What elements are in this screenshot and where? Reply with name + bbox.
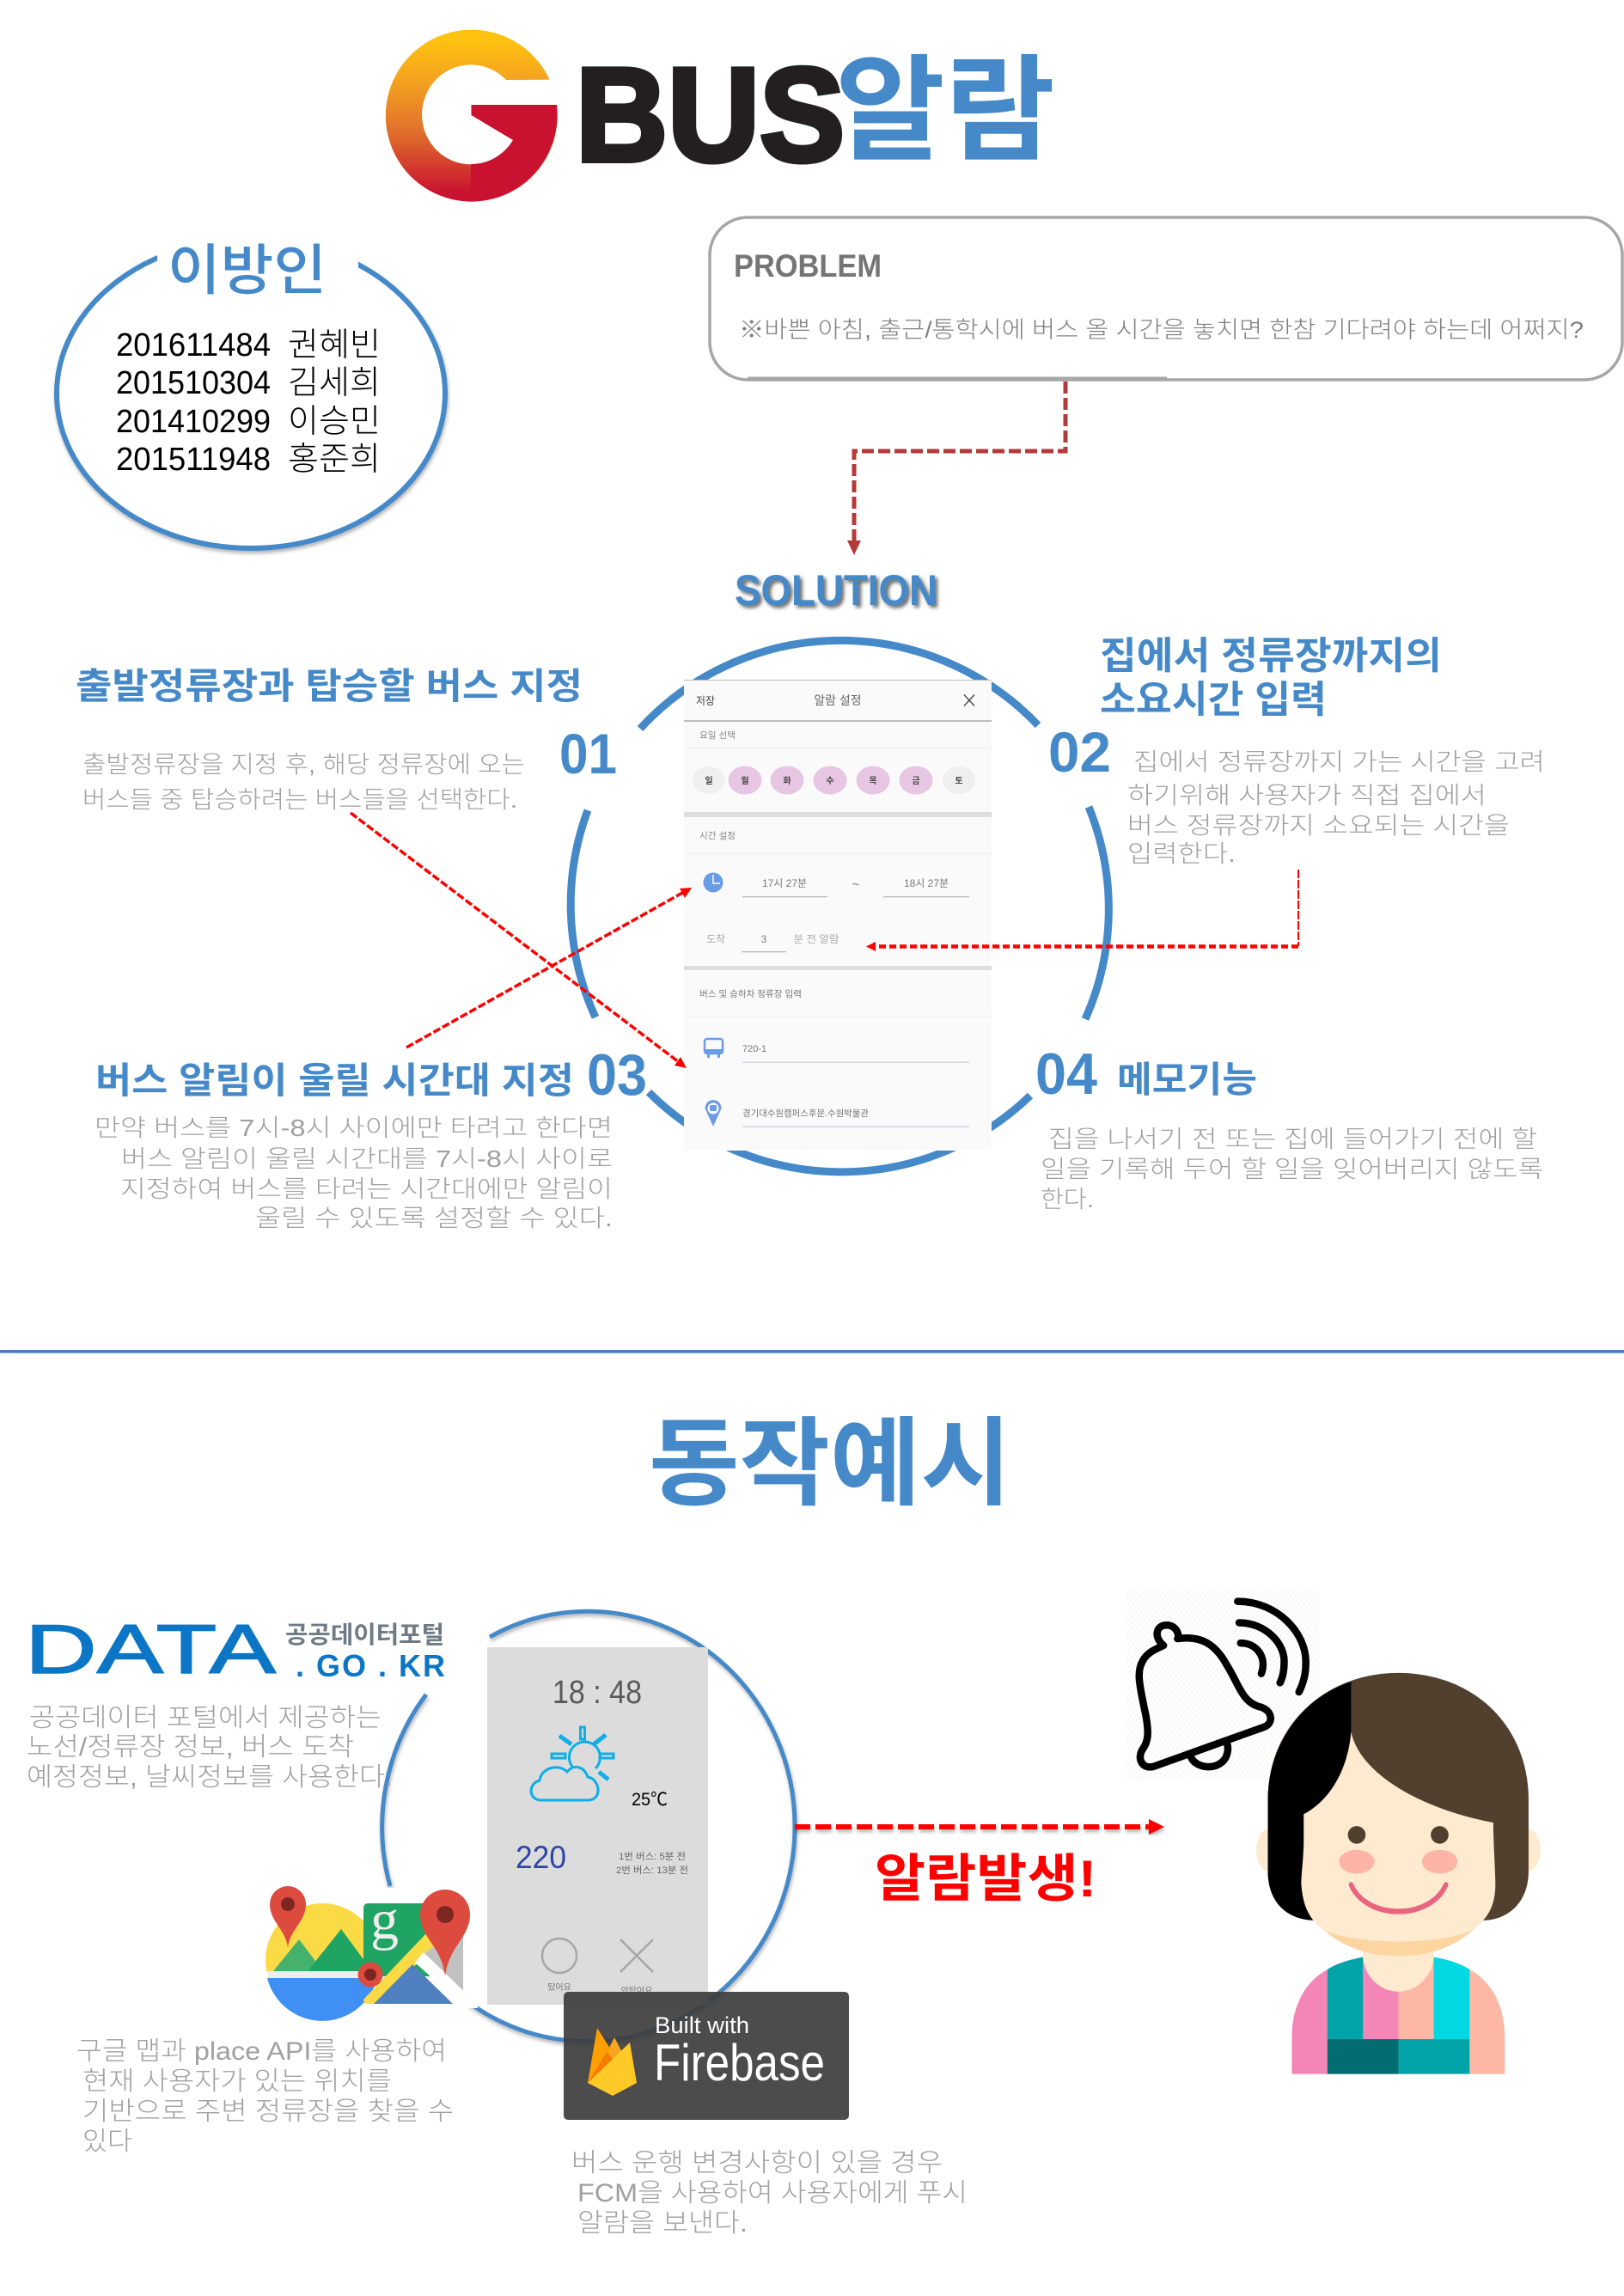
step 04 heading: 메모기능 xyxy=(1117,1059,1257,1100)
arrow: step 01 to bus input xyxy=(351,813,687,1068)
text: public data description: 노선/정류장 정보, 버스 도착 xyxy=(27,1733,354,1762)
face xyxy=(1301,1732,1495,1942)
step 03 description: 버스 알림이 울릴 시간대를 7시-8시 사이로 xyxy=(121,1145,613,1172)
text: google maps description: 현재 사용자가 있는 위치를 xyxy=(82,2067,392,2096)
text: public data description xyxy=(27,1704,393,1792)
panel: team members xyxy=(57,228,445,548)
step 01 description: 출발정류장을 지정 후, 해당 정류장에 오는 xyxy=(82,751,525,778)
icon: clock xyxy=(703,873,723,892)
data wordmark: DATA xyxy=(25,1611,276,1688)
team member list: 홍준희 xyxy=(288,442,381,478)
bus number: 220 xyxy=(516,1840,566,1875)
text: google maps description: 구글 맵과 place API를 사용하여 xyxy=(76,2037,447,2066)
step 01 description xyxy=(82,751,525,813)
step 02 heading xyxy=(1100,635,1442,721)
day of week selector: 금 xyxy=(912,776,920,786)
arrow: problem to solution xyxy=(847,382,1065,555)
day of week selector: 일 xyxy=(705,775,713,786)
icon: person xyxy=(1256,1673,1541,2075)
step 02 description: 입력한다. xyxy=(1127,840,1236,867)
places circle xyxy=(266,1886,379,2021)
bus arrival times: 1번 버스: 5분 전 xyxy=(619,1851,686,1862)
panel: problem xyxy=(710,217,1622,380)
step 02 description: 하기위해 사용자가 직접 집에서 xyxy=(1127,782,1487,809)
app header: 저장 xyxy=(696,695,715,707)
text: firebase description xyxy=(571,2149,968,2238)
logo wordmark BUS: BUS xyxy=(576,40,845,189)
step 02 heading: 소요시간 입력 xyxy=(1100,679,1327,721)
step 04 description: 집을 나서기 전 또는 집에 들어가기 전에 할 xyxy=(1048,1126,1537,1152)
day of week selector: 요일 선택 xyxy=(699,730,736,741)
eyes xyxy=(1348,1826,1365,1844)
button labels xyxy=(547,1982,652,1996)
step 01 number: 01 xyxy=(559,722,617,785)
problem box outline xyxy=(710,217,1622,380)
step 04 description: 한다. xyxy=(1041,1186,1094,1212)
team member list: 201410299 xyxy=(116,404,271,440)
icon: boarded circle xyxy=(542,1939,577,1973)
step 02 description: 집에서 정류장까지 가는 시간을 고려 xyxy=(1133,748,1545,775)
time settings: 18시 27분 xyxy=(904,877,949,889)
icon: bus xyxy=(705,1039,723,1058)
team member list xyxy=(116,327,381,478)
text: firebase description: FCM을 사용하여 사용자에게 푸시 xyxy=(577,2179,968,2207)
day of week selector: 목 xyxy=(869,776,877,786)
text: google maps description: 있다 xyxy=(82,2128,132,2156)
time settings: 3 xyxy=(761,933,767,945)
built with text: Built with xyxy=(655,2012,749,2038)
icon: not boarded cross xyxy=(620,1939,653,1972)
logo G mark xyxy=(386,30,558,202)
step 03 heading: 버스 알림이 울릴 시간대 지정 xyxy=(95,1060,574,1101)
button labels: 안탔어요 xyxy=(621,1986,652,1996)
team name heading: 이방인 xyxy=(168,240,327,302)
temperature: 25℃ xyxy=(632,1790,668,1810)
icon: stop pin xyxy=(705,1100,722,1127)
panel: alarm settings app screen xyxy=(684,680,992,1151)
step 03 description: 만약 버스를 7시-8시 사이에만 타려고 한다면 xyxy=(95,1114,613,1141)
team member list: 201510304 xyxy=(116,365,271,401)
problem description: ※바쁜 아침, 출근/통학시에 버스 올 시간을 놓치면 한참 기다려야 하는데 어쩌지? xyxy=(739,317,1584,343)
step 02 heading: 집에서 정류장까지의 xyxy=(1100,635,1442,677)
heading: solution: SOLUTION xyxy=(735,566,937,614)
step 04 number: 04 xyxy=(1035,1041,1097,1107)
text: firebase description: 버스 운행 변경사항이 있을 경우 xyxy=(571,2149,943,2177)
time settings: 도착 xyxy=(706,933,725,945)
day of week selector xyxy=(684,730,992,794)
logo: G BUS 알람 xyxy=(386,30,1055,202)
second circle outline xyxy=(382,1611,795,2042)
day of week selector: 토 xyxy=(955,776,963,786)
icon: google maps and places xyxy=(266,1886,478,2021)
bus and stop input xyxy=(684,988,992,1127)
text: public data description: 예정정보, 날씨정보를 사용한다. xyxy=(27,1763,393,1792)
bus and stop input: 720-1 xyxy=(742,1044,766,1054)
step 02 xyxy=(1048,635,1545,867)
icon: weather xyxy=(531,1727,614,1800)
team member list: 이승민 xyxy=(288,404,381,440)
heading: 동작예시: 동작예시 xyxy=(649,1410,1011,1517)
big pin xyxy=(420,1890,470,1976)
text: google maps description: 기반으로 주변 정류장을 찾을 수 xyxy=(82,2098,454,2126)
problem heading: PROBLEM xyxy=(734,248,882,284)
day of week selector: 화 xyxy=(783,775,791,786)
step 03 xyxy=(95,1042,647,1231)
time settings: 시간 설정 xyxy=(699,831,736,841)
red junction marker xyxy=(357,1963,383,1987)
panel: lock screen notification xyxy=(487,1647,708,2005)
text: public data description: 공공데이터 포털에서 제공하는 xyxy=(29,1704,382,1732)
step 01 heading: 출발정류장과 탑승할 버스 지정 xyxy=(76,666,583,706)
badge background xyxy=(564,1992,849,2120)
button labels: 탔어요 xyxy=(547,1982,571,1993)
step 04 description xyxy=(1041,1126,1543,1212)
team member list: 권혜빈 xyxy=(288,327,381,363)
step 02 number: 02 xyxy=(1048,720,1111,784)
hair xyxy=(1268,1673,1529,1920)
neck xyxy=(1363,1945,1434,1992)
chin shadow xyxy=(1316,1922,1481,1956)
step 03 description: 울릴 수 있도록 설정할 수 있다. xyxy=(255,1205,613,1231)
step 04 description: 일을 기록해 두어 할 일을 잊어버리지 않도록 xyxy=(1041,1156,1543,1182)
team ellipse outline xyxy=(57,239,445,548)
day of week selector: 수 xyxy=(826,776,834,786)
step 04 xyxy=(1035,1041,1543,1212)
time settings: 17시 27분 xyxy=(762,877,807,889)
portal name: 공공데이터포털 xyxy=(285,1621,444,1648)
text: google maps description xyxy=(76,2037,454,2156)
app background xyxy=(684,680,992,1151)
app header xyxy=(696,693,974,707)
team member list: 201511948 xyxy=(116,442,271,478)
text: alarm occurs: 알람발생! xyxy=(875,1850,1096,1908)
icon: firebase flame xyxy=(588,2028,637,2096)
step 02 description xyxy=(1127,748,1545,867)
step 03 description xyxy=(95,1114,613,1231)
bus and stop input: 버스 및 승하차 정류장 입력 xyxy=(699,988,802,999)
text: firebase description: 알람을 보낸다. xyxy=(577,2209,748,2238)
day of week selector: 월 xyxy=(741,775,749,786)
domain text: . GO . KR xyxy=(296,1648,445,1683)
step 02 description: 버스 정류장까지 소요되는 시간을 xyxy=(1127,812,1510,839)
arrow: notification to user xyxy=(795,1819,1164,1835)
clock time: 18 : 48 xyxy=(553,1675,642,1711)
arrow: step 02 to arrival setting xyxy=(866,870,1298,951)
cheeks xyxy=(1339,1850,1375,1873)
team member list: 김세희 xyxy=(288,365,381,401)
body xyxy=(1291,1956,1505,2075)
badge: built with firebase xyxy=(564,1992,849,2120)
arrow: step 03 to time setting xyxy=(406,888,692,1047)
time settings: 분 전 알람 xyxy=(794,933,839,945)
app header: 알람 설정 xyxy=(814,693,862,707)
divider xyxy=(0,1350,1624,1353)
firebase text: Firebase xyxy=(654,2034,825,2091)
bus and stop input: 경기대수원캠퍼스후문.수원박물관 xyxy=(742,1108,869,1119)
bus arrival times xyxy=(616,1851,688,1876)
lock screen background xyxy=(487,1647,708,2005)
maps tile: g xyxy=(370,1889,399,1951)
maps tile xyxy=(363,1889,477,2006)
step 01 xyxy=(76,666,617,813)
smile xyxy=(1351,1884,1446,1912)
team member list: 201611484 xyxy=(116,327,271,363)
time settings: ~ xyxy=(852,877,860,892)
time settings xyxy=(684,831,992,952)
step 03 number: 03 xyxy=(587,1042,647,1108)
ears xyxy=(1256,1829,1281,1872)
bus arrival times: 2번 버스: 13분 전 xyxy=(616,1865,688,1876)
logo: data.go.kr xyxy=(25,1611,445,1688)
step 03 description: 지정하여 버스를 타려는 시간대에만 알림이 xyxy=(120,1175,613,1202)
main circle ring segments xyxy=(571,640,1108,1172)
logo wordmark 알람: 알람 xyxy=(835,47,1055,175)
step 01 description: 버스들 중 탑승하려는 버스들을 선택한다. xyxy=(82,786,517,813)
icon: ringing bell xyxy=(1126,1590,1319,1780)
